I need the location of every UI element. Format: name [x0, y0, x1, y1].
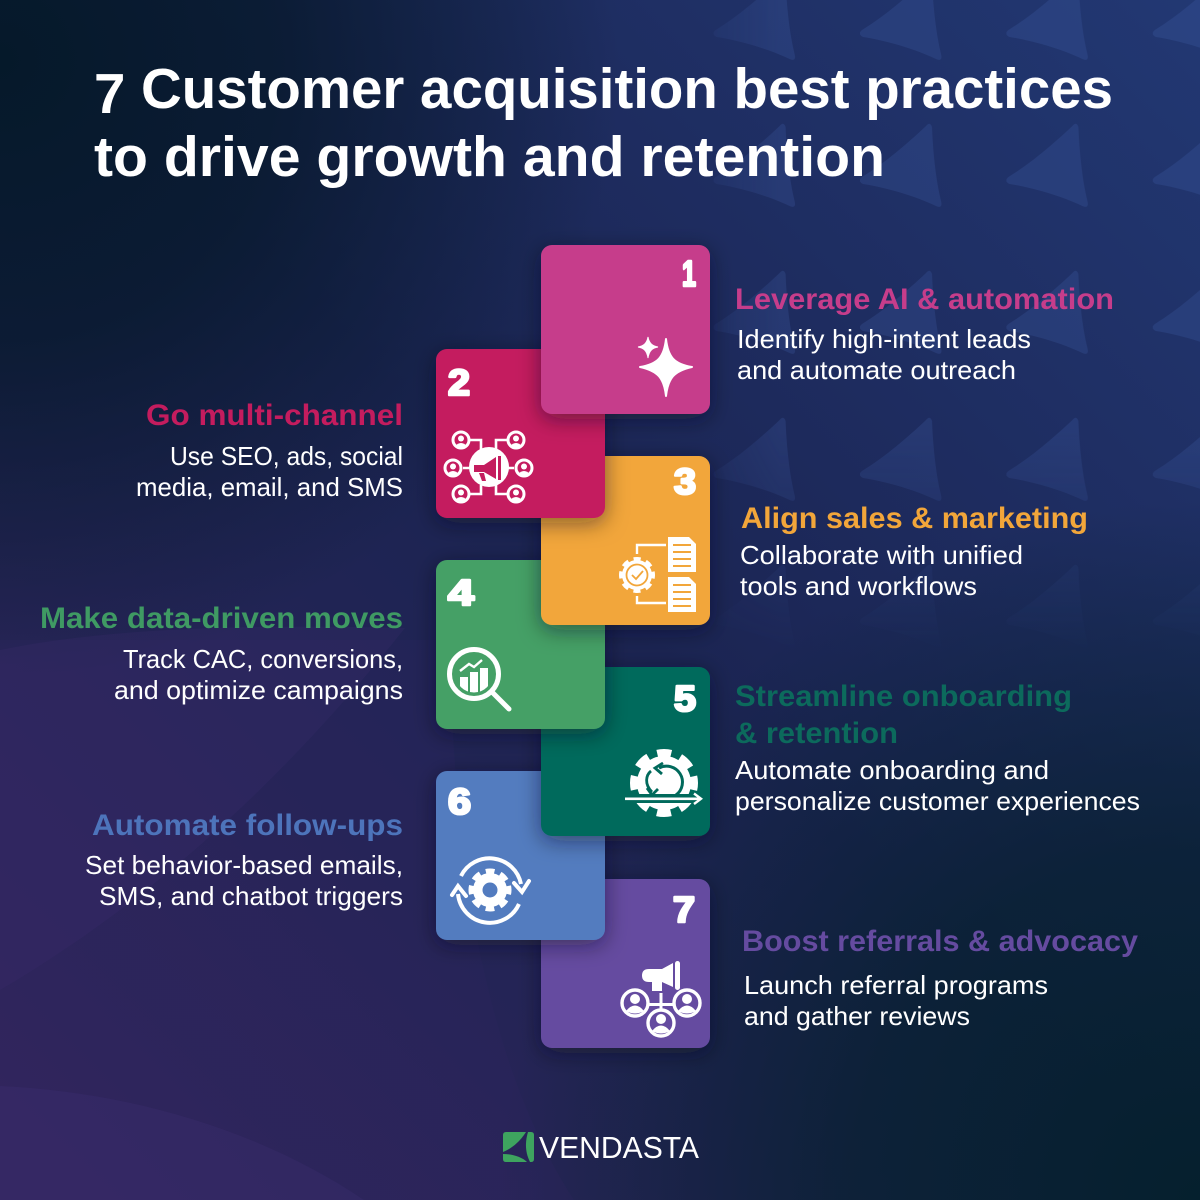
icon: agile gear [622, 753, 706, 813]
logo mark [503, 1132, 534, 1162]
number 5: 5 [674, 678, 696, 719]
icon: multi-channel network [445, 432, 532, 502]
step 3 card [541, 456, 710, 625]
text: data-driven moves: Make data-driven moves [40, 602, 403, 635]
logo: VENDASTA [539, 1130, 699, 1165]
text: boost referrals: and gather reviews [744, 1001, 970, 1031]
text: automate follow-ups: Automate follow-ups [92, 809, 403, 842]
text: leverage AI: Leverage AI & automation [735, 283, 1114, 316]
number 1: 1 [682, 253, 696, 294]
title: to drive growth and retention [94, 125, 885, 189]
step 6 card [436, 771, 605, 940]
text: leverage AI: Identify high-intent leads [737, 324, 1031, 354]
text: streamline onboarding: Streamline onboarding [735, 680, 1072, 713]
text: automate follow-ups: Set behavior-based emails, [85, 850, 403, 880]
text: automate follow-ups [85, 809, 403, 911]
text: streamline onboarding [735, 680, 1140, 816]
text: go multi-channel: media, email, and SMS [136, 472, 403, 502]
title: 7 [94, 62, 125, 126]
text: data-driven moves: Track CAC, conversions, [123, 644, 403, 674]
icon: gear with cycle arrows [452, 858, 529, 923]
text: boost referrals [742, 925, 1138, 1031]
icon: gear and documents [621, 537, 696, 612]
number 6: 6 [448, 781, 471, 822]
icon: megaphone and people [622, 961, 700, 1036]
step 1 card [541, 245, 710, 414]
text: align sales and marketing [740, 502, 1088, 601]
text: go multi-channel: Go multi-channel [146, 399, 403, 432]
text: go multi-channel: Use SEO, ads, social [170, 441, 403, 471]
number 4: 4 [448, 572, 474, 613]
number 7: 7 [673, 889, 695, 930]
text: streamline onboarding: Automate onboarding and [735, 755, 1049, 785]
text: streamline onboarding: personalize customer experiences [735, 786, 1140, 816]
step 7 card [541, 879, 710, 1048]
number 2: 2 [448, 362, 470, 403]
text: go multi-channel [136, 399, 403, 502]
step 4 card [436, 560, 605, 729]
text: data-driven moves: and optimize campaigns [114, 675, 403, 705]
text: leverage AI: and automate outreach [737, 355, 1016, 385]
text: boost referrals: Boost referrals & advocacy [742, 925, 1138, 958]
text: align sales and marketing: tools and workflows [740, 571, 977, 601]
step 5 card [541, 667, 710, 836]
text: data-driven moves [40, 602, 403, 705]
number 3: 3 [674, 461, 696, 502]
icon: magnifier with chart [450, 650, 509, 709]
title: Customer acquisition best practices [125, 57, 1113, 121]
title [94, 57, 1113, 189]
icon: sparkles [638, 337, 692, 396]
text: automate follow-ups: SMS, and chatbot triggers [99, 881, 403, 911]
step 2 card [436, 349, 605, 518]
text: align sales and marketing: Collaborate with unified [740, 540, 1023, 570]
text: boost referrals: Launch referral programs [744, 970, 1048, 1000]
text: align sales and marketing: Align sales & marketing [741, 502, 1088, 535]
text: leverage AI [735, 283, 1114, 385]
text: streamline onboarding: & retention [735, 717, 898, 750]
